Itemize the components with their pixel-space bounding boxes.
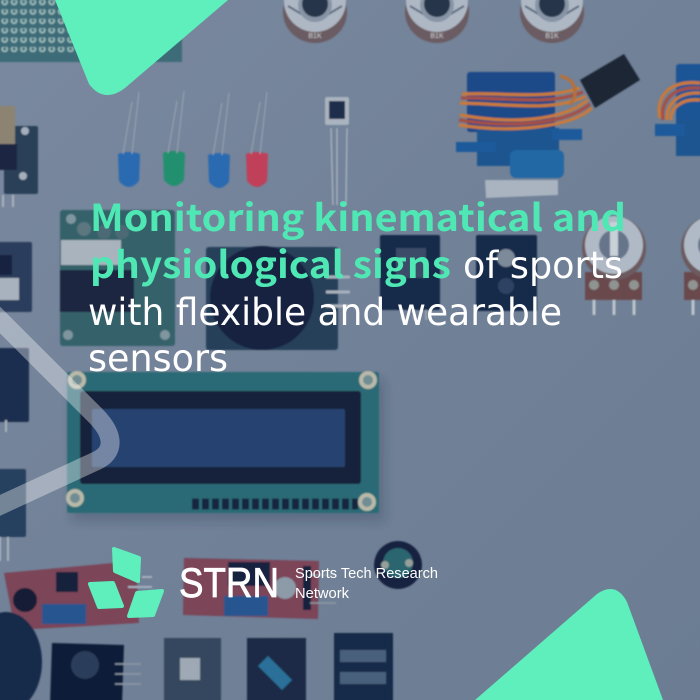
component: red sensor module	[183, 558, 336, 619]
component: perfboard	[0, 0, 182, 62]
component: small sensor modules	[380, 235, 537, 320]
title: with flexible and wearable	[88, 291, 562, 334]
title: of sports	[463, 244, 623, 287]
component: right potentiometers	[582, 216, 700, 315]
component: left sensor modules	[0, 242, 32, 561]
component: top potentiometers	[283, 0, 584, 43]
component: bottom sensor modules	[0, 612, 393, 700]
decorative translucent triangle outline	[0, 310, 110, 510]
accent shape: top green triangle	[55, 0, 228, 95]
component: servo motor with cable	[456, 54, 640, 198]
component: second servo motor	[655, 64, 700, 156]
title	[88, 188, 626, 380]
logo: STRN mark and wordmark	[90, 549, 438, 616]
component: microphone module	[4, 561, 152, 630]
icon: three green tiles	[90, 549, 162, 616]
component: laser module	[0, 106, 38, 207]
tagline: Network	[295, 586, 350, 602]
component: LCD display	[67, 372, 384, 521]
component: four LEDs	[118, 91, 268, 188]
accent shape: bottom green triangle	[475, 589, 663, 700]
component: joystick	[206, 246, 350, 350]
component: buzzer	[374, 541, 422, 589]
wordmark: STRN	[179, 559, 279, 606]
title: Monitoring kinematical and	[90, 188, 626, 242]
tagline: Sports Tech Research	[295, 566, 438, 582]
title: physiological signs	[90, 235, 451, 289]
component: relay board	[60, 210, 175, 346]
tagline	[295, 566, 438, 602]
title: sensors	[88, 337, 228, 380]
component: infrared receiver	[325, 97, 349, 205]
